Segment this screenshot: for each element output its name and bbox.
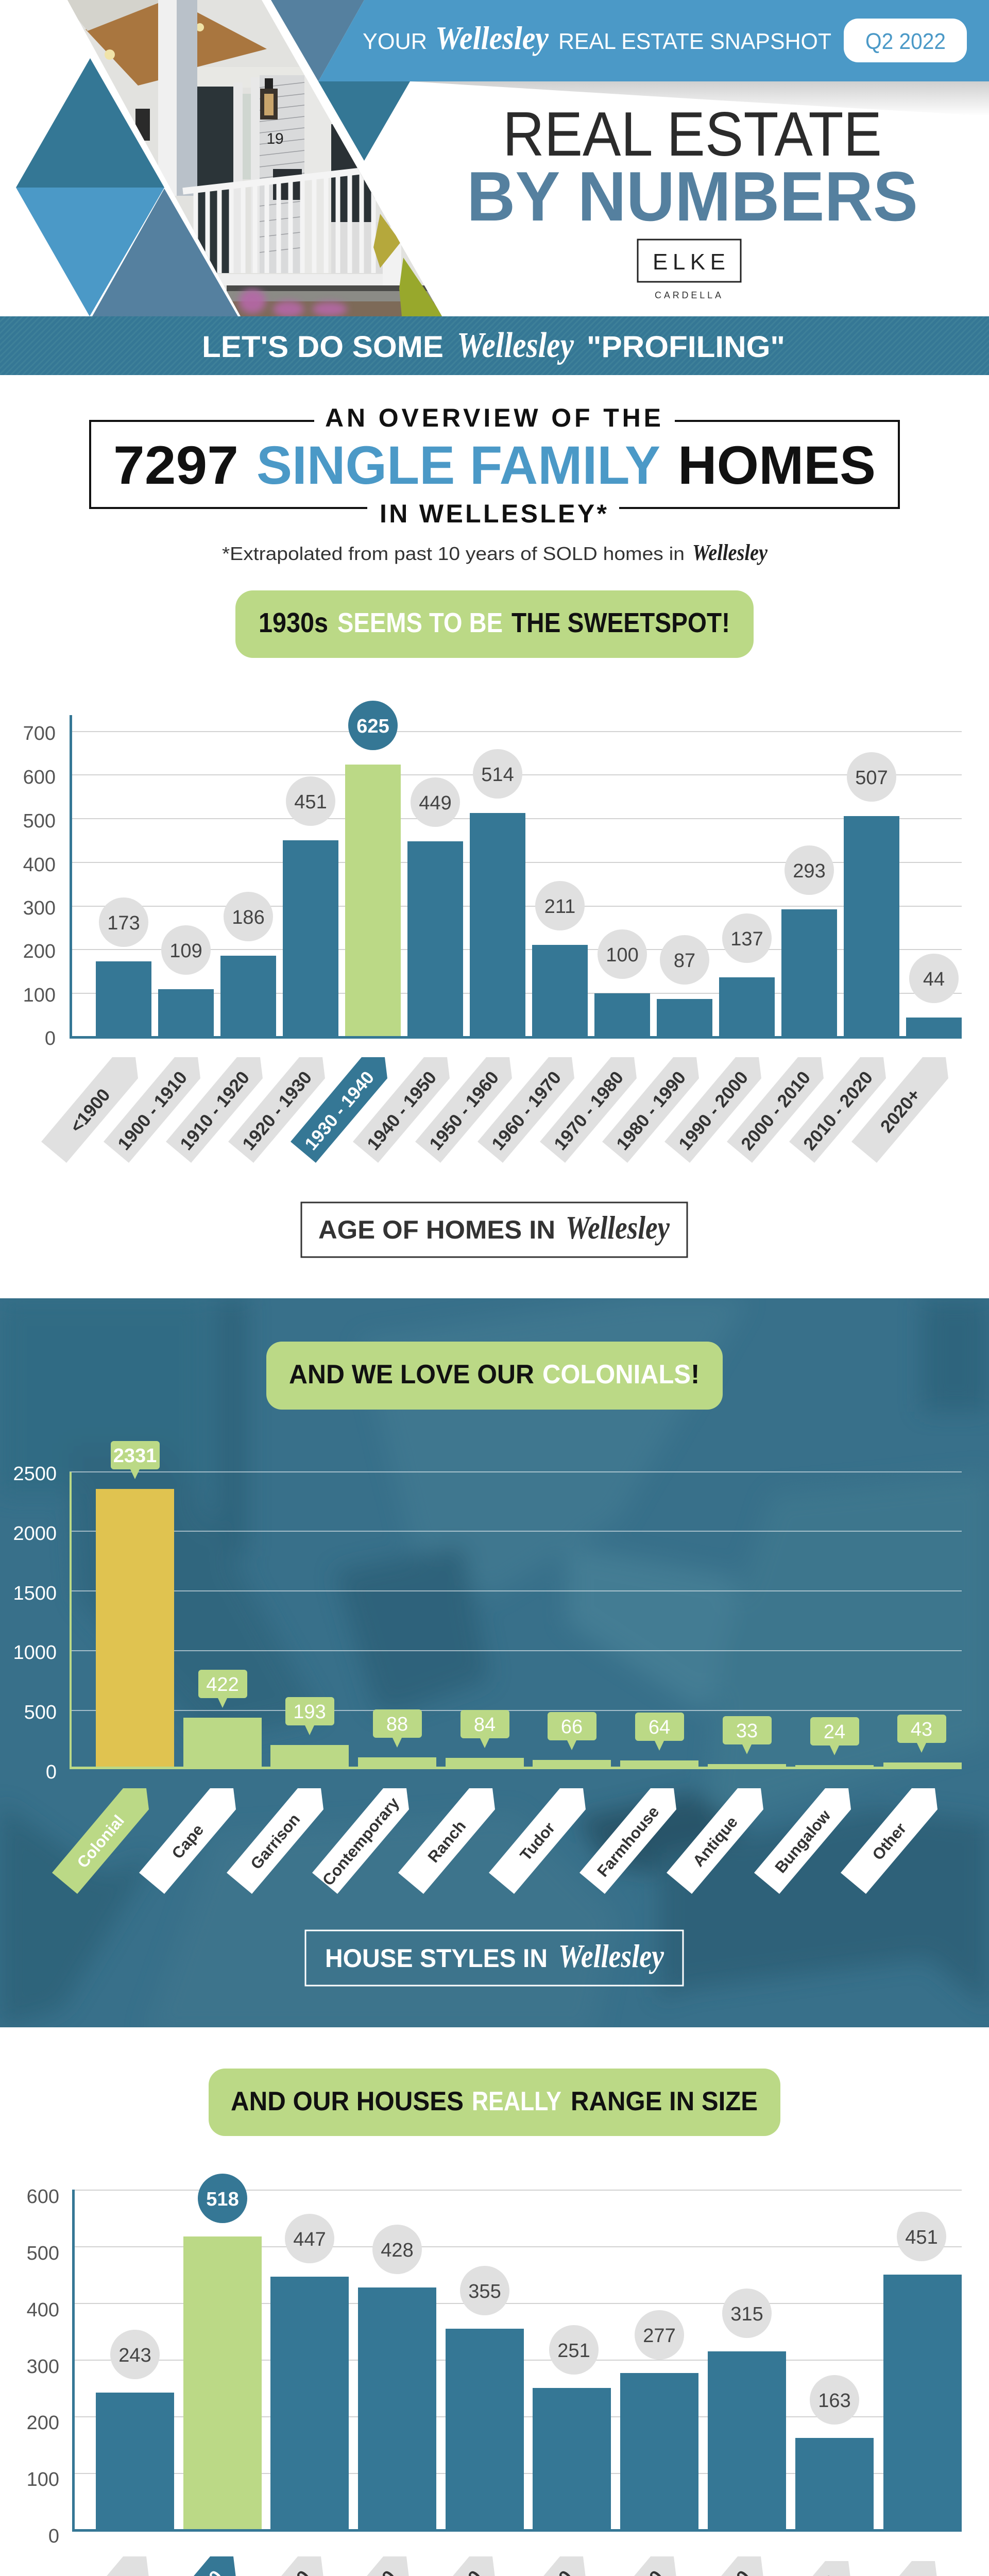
overview title xyxy=(90,403,899,528)
overview title: AN OVERVIEW OF THE xyxy=(325,403,661,432)
value bubbles: 518 xyxy=(206,2189,239,2210)
category tags: Other xyxy=(868,1819,910,1863)
heading pill: colonials: AND WE LOVE OUR xyxy=(289,1360,534,1389)
top band shadow xyxy=(410,81,989,116)
category tags xyxy=(52,2556,937,2576)
panel: house styles xyxy=(0,1298,989,2035)
chart title: age of homes xyxy=(301,1202,687,1257)
value bubbles: 44 xyxy=(923,969,945,990)
porch photo: 19 xyxy=(266,130,284,147)
value bubbles: 428 xyxy=(381,2240,414,2261)
photo background xyxy=(0,1298,989,2035)
overview title: IN WELLESLEY* xyxy=(380,499,607,528)
logo: CARDELLA xyxy=(655,290,721,300)
value bubbles: 355 xyxy=(468,2281,501,2302)
gridlines and y axis labels: 300 xyxy=(23,897,56,919)
overview title: SINGLE FAMILY xyxy=(257,435,660,496)
gridlines and y axis labels: 500 xyxy=(27,2243,59,2264)
category tags: 2000 - 2010 xyxy=(737,1067,814,1154)
category tags: 1990 - 2000 xyxy=(675,1067,752,1154)
heading pill: colonials: ! xyxy=(691,1360,700,1389)
category tags: Colonial xyxy=(74,1811,128,1871)
value bubbles: 137 xyxy=(730,928,763,950)
heading pill: size: REALLY xyxy=(472,2087,561,2116)
category tags: Antique xyxy=(689,1813,741,1870)
value callouts: 84 xyxy=(474,1714,496,1736)
gridlines and y axis labels: 300 xyxy=(27,2356,59,2378)
gridlines and y axis labels: 0 xyxy=(48,2526,59,2547)
category tags: 1900 - 1910 xyxy=(114,1067,191,1154)
profiling banner: Wellesley xyxy=(457,326,574,365)
value callouts: 2331 xyxy=(113,1445,157,1467)
overview title: HOMES xyxy=(678,435,876,496)
chart title: house styles: Wellesley xyxy=(558,1938,664,1974)
gridlines and y axis labels xyxy=(27,2186,962,2547)
chart: age of homes xyxy=(23,701,962,1163)
value bubbles: 514 xyxy=(481,764,514,786)
gridlines and y axis labels: 600 xyxy=(27,2186,59,2208)
profiling banner xyxy=(0,316,989,375)
quarter pill xyxy=(844,19,967,62)
category tags: Contemporary xyxy=(319,1793,403,1889)
heading pill: colonials xyxy=(266,1342,723,1410)
porch photo xyxy=(62,0,448,319)
value bubbles: 447 xyxy=(293,2229,326,2250)
value bubbles: 625 xyxy=(356,716,389,737)
value bubbles: 163 xyxy=(818,2390,851,2412)
value callouts: 43 xyxy=(911,1719,932,1740)
title: BY NUMBERS xyxy=(467,157,918,235)
gridlines and y axis labels: 400 xyxy=(27,2299,59,2321)
category tags: 2020+ xyxy=(877,1085,925,1137)
snapshot band: Wellesley xyxy=(435,20,549,56)
category tags: 1930 - 1940 xyxy=(301,1067,378,1154)
category tags: 1950 - 1960 xyxy=(425,1067,503,1154)
heading pill: size: RANGE IN SIZE xyxy=(571,2087,758,2116)
bars xyxy=(72,2190,962,2532)
category tags xyxy=(52,1788,937,1894)
gridlines and y axis labels: 100 xyxy=(27,2469,59,2490)
snapshot band: REAL ESTATE SNAPSHOT xyxy=(558,29,831,54)
value bubbles: 87 xyxy=(674,950,695,972)
value callouts: 33 xyxy=(736,1720,758,1742)
chart title: age of homes: Wellesley xyxy=(566,1209,670,1246)
value callouts: 193 xyxy=(293,1701,326,1723)
value bubbles: 293 xyxy=(793,860,826,882)
chart title: house styles: HOUSE STYLES IN xyxy=(325,1944,548,1973)
heading pill: sweetspot: THE SWEETSPOT! xyxy=(511,607,730,638)
category tags: Ranch xyxy=(424,1817,469,1866)
value callouts: 66 xyxy=(561,1716,583,1738)
snapshot band: YOUR xyxy=(363,29,427,54)
gridlines and y axis labels xyxy=(13,1463,962,1783)
value bubbles: 315 xyxy=(730,2303,763,2325)
heading pill: sweetspot xyxy=(235,590,754,658)
category tags: 2010 - 2020 xyxy=(799,1067,877,1154)
category tags: <1900 xyxy=(66,1085,114,1137)
gridlines and y axis labels: 500 xyxy=(23,810,56,832)
value bubbles xyxy=(110,2174,946,2425)
value bubbles xyxy=(99,701,959,1003)
bars xyxy=(70,1472,962,1769)
footnote: *Extrapolated from past 10 years of SOLD homes in xyxy=(222,543,685,564)
category tags: Tudor xyxy=(516,1819,558,1864)
gridlines and y axis labels: 0 xyxy=(46,1761,57,1783)
gridlines and y axis labels: 1000 xyxy=(13,1642,57,1664)
gridlines and y axis labels: 0 xyxy=(45,1028,56,1049)
logo xyxy=(638,240,741,300)
value callouts: 64 xyxy=(649,1717,670,1738)
category tags: Cape xyxy=(168,1821,207,1862)
snapshot band xyxy=(318,0,989,81)
heading pill: sweetspot: SEEMS TO BE xyxy=(337,607,503,638)
chart title: age of homes: AGE OF HOMES IN xyxy=(318,1215,555,1244)
title xyxy=(467,99,918,235)
category tags xyxy=(41,1057,948,1163)
value callouts: 88 xyxy=(386,1714,408,1735)
gridlines and y axis labels: 2000 xyxy=(13,1523,57,1545)
gridlines and y axis labels: 2500 xyxy=(13,1463,57,1485)
value bubbles: 243 xyxy=(118,2345,151,2366)
logo: ELKE xyxy=(653,249,725,275)
category tags: Bungalow xyxy=(771,1806,834,1876)
chart: house styles xyxy=(13,1441,962,1894)
value bubbles: 507 xyxy=(855,767,888,789)
value bubbles: 186 xyxy=(232,907,265,928)
category tags: 1960 - 1970 xyxy=(488,1067,565,1154)
value bubbles: 251 xyxy=(557,2340,590,2362)
gridlines and y axis labels xyxy=(23,723,962,1049)
category tags: 1980 - 1990 xyxy=(612,1067,690,1154)
value bubbles: 109 xyxy=(169,940,202,962)
value bubbles: 277 xyxy=(643,2325,676,2347)
gridlines and y axis labels: 400 xyxy=(23,854,56,876)
category tags: Garrison xyxy=(247,1810,303,1873)
gridlines and y axis labels: 500 xyxy=(24,1702,57,1723)
geometric triangles xyxy=(16,0,410,316)
category tags: 1910 - 1920 xyxy=(176,1067,253,1154)
quarter pill: Q2 2022 xyxy=(865,29,946,54)
category tags: 1970 - 1980 xyxy=(550,1067,627,1154)
gridlines and y axis labels: 100 xyxy=(23,985,56,1006)
gridlines and y axis labels: 200 xyxy=(23,941,56,962)
value bubbles: 449 xyxy=(419,792,452,814)
profiling banner: "PROFILING" xyxy=(587,330,785,364)
value callouts xyxy=(111,1441,946,1755)
chart title: house styles xyxy=(305,1930,683,1986)
heading pill: size xyxy=(209,2069,780,2136)
heading pill: sweetspot: 1930s xyxy=(259,607,328,638)
value callouts: 422 xyxy=(206,1674,239,1696)
value bubbles: 100 xyxy=(606,944,639,966)
chart: size of homes xyxy=(27,2174,962,2576)
title: REAL ESTATE xyxy=(503,99,882,169)
category tags: 1920 - 1930 xyxy=(238,1067,316,1154)
footnote: Wellesley xyxy=(692,540,768,565)
gridlines and y axis labels: 700 xyxy=(23,723,56,744)
heading pill: size: AND OUR HOUSES xyxy=(231,2087,464,2116)
category tags: 1940 - 1950 xyxy=(363,1067,440,1154)
heading pill: colonials: COLONIALS xyxy=(542,1360,691,1389)
footnote xyxy=(222,540,768,565)
gridlines and y axis labels: 1500 xyxy=(13,1583,57,1604)
gridlines and y axis labels: 200 xyxy=(27,2412,59,2434)
header xyxy=(16,0,989,319)
overview title: 7297 xyxy=(113,435,238,496)
bars xyxy=(70,715,962,1039)
value bubbles: 173 xyxy=(107,912,140,934)
value bubbles: 211 xyxy=(544,896,575,918)
category tags: Farmhouse xyxy=(593,1803,662,1880)
value bubbles: 451 xyxy=(905,2227,938,2248)
value callouts: 24 xyxy=(824,1721,845,1743)
gridlines and y axis labels: 600 xyxy=(23,767,56,788)
profiling banner: LET'S DO SOME xyxy=(202,330,444,364)
value bubbles: 451 xyxy=(294,791,327,813)
